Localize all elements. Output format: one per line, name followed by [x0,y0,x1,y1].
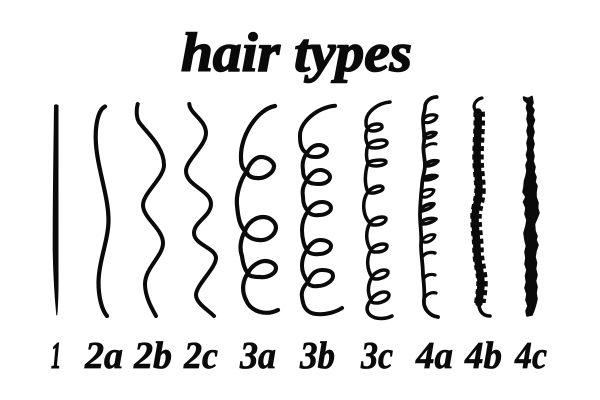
hair strand: type 1 [53,105,58,315]
hair strand: type 4c [523,96,539,316]
hair strand: type 3c [364,102,392,318]
label: 4a: 4a [415,335,453,377]
title: hair types [181,22,412,83]
label: 2a: 2a [84,335,123,377]
hair strand: type 4b [474,98,490,316]
label: 3a: 3a [239,335,276,377]
label: 2c: 2c [183,335,218,377]
hair strand: type 4a [420,97,438,317]
hair strand: type 2a [96,106,108,316]
hair strand: type 3a [237,106,278,313]
hair strand: type 2c [186,104,216,316]
label: 2b: 2b [133,335,172,377]
label: 4c: 4c [514,335,547,377]
label: 3c: 3c [360,335,393,377]
label: 3b: 3b [299,335,335,377]
label: 1: 1 [51,335,61,377]
label: 4b: 4b [464,335,502,377]
hair strand: type 2b [137,104,164,316]
hair strand: type 3b [300,106,342,314]
